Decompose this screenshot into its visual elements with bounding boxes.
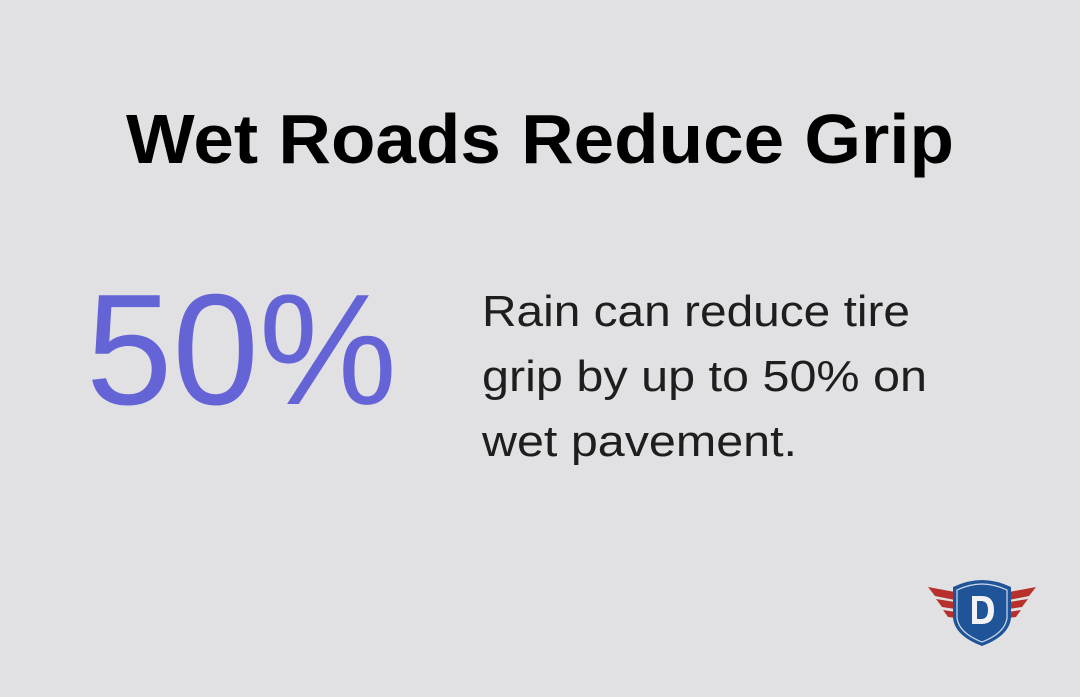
icon: logo shield with wings	[928, 580, 1036, 646]
description text: grip by up to 50% on	[482, 352, 927, 401]
description text: Rain can reduce tire	[482, 287, 910, 336]
description text: wet pavement.	[481, 417, 797, 466]
big stat: 50%	[86, 262, 397, 438]
title: Wet Roads Reduce Grip	[126, 100, 954, 178]
description text	[481, 287, 927, 466]
